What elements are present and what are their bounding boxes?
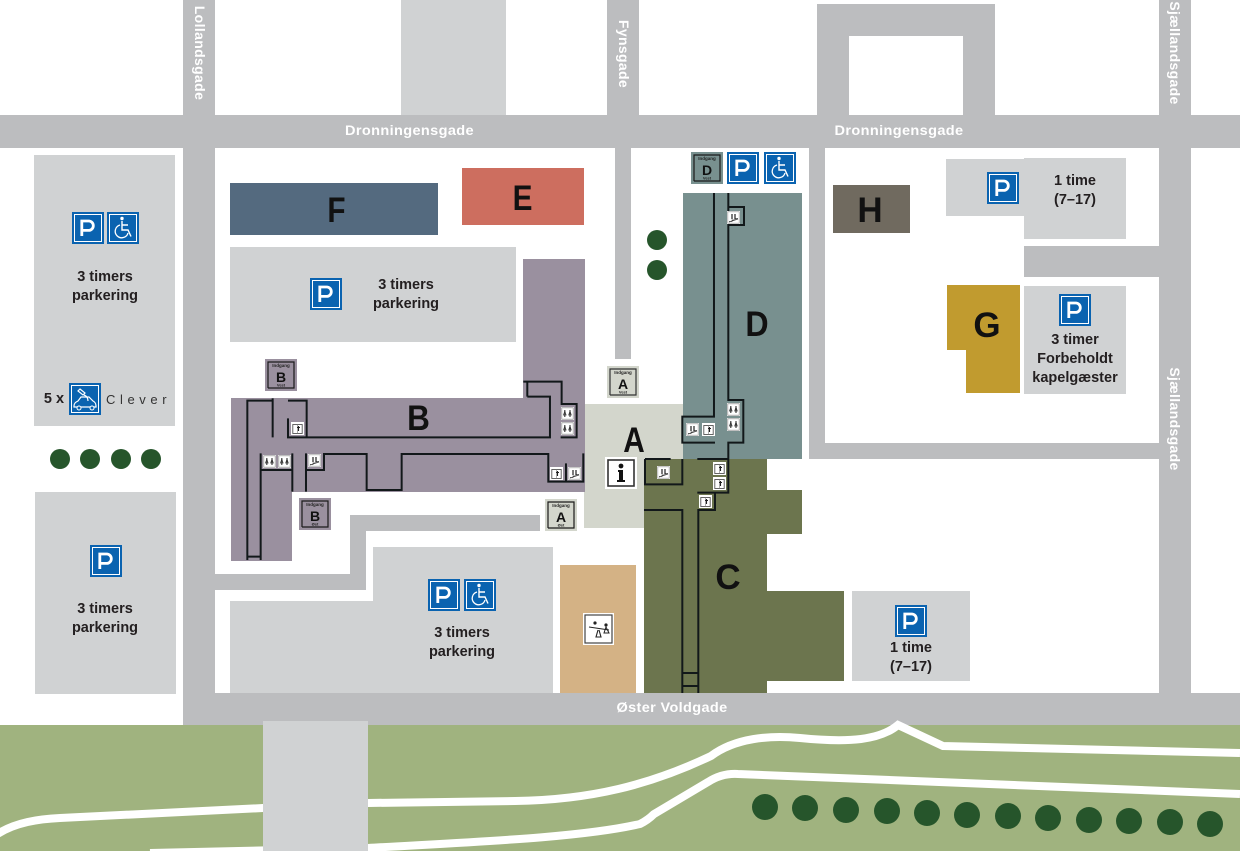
building H xyxy=(833,185,910,233)
entrance sign: B Vest: B xyxy=(276,369,286,385)
entrance sign: B Vest: Indgang xyxy=(272,363,290,368)
entrance sign: B Øst: Indgang xyxy=(306,502,324,507)
road labels: Dronningensgade xyxy=(345,122,474,138)
building G: G xyxy=(973,306,1001,345)
parking signs xyxy=(72,152,1091,637)
top parking strip xyxy=(401,0,506,115)
road labels xyxy=(192,1,1183,715)
parking labels: (7–17) xyxy=(890,659,932,675)
floor plan lines: buildings A, C and D xyxy=(644,193,743,693)
entrance sign: A Vest: Indgang xyxy=(614,370,632,375)
entrance sign: B Øst: Øst xyxy=(312,522,319,526)
parking lots xyxy=(34,155,1126,694)
parking labels: 3 timers xyxy=(378,277,434,293)
entrance sign: A Vest: A xyxy=(618,376,628,392)
entrance sign: D Vest: Indgang xyxy=(698,156,716,161)
entrance sign: B Vest: Vest xyxy=(277,382,286,388)
building A xyxy=(584,404,684,528)
parking labels: 3 timers xyxy=(77,269,133,285)
parking labels: 3 timers xyxy=(77,601,133,617)
entrance sign: A Øst xyxy=(545,499,577,531)
parking labels: 1 time xyxy=(1054,173,1096,189)
entrance sign: A Øst: A xyxy=(556,509,566,525)
trees: park row xyxy=(752,794,1223,837)
building C xyxy=(644,459,844,693)
icon: playground xyxy=(583,613,614,645)
facility icons xyxy=(263,211,740,508)
building B xyxy=(231,259,585,561)
parking labels: parkering xyxy=(373,296,439,312)
building F xyxy=(230,183,438,235)
building letters: B xyxy=(407,400,430,438)
parking labels xyxy=(72,173,1118,675)
building E xyxy=(462,168,584,225)
parking labels: (7–17) xyxy=(1054,192,1096,208)
clever charging xyxy=(44,383,171,415)
parking labels: 1 time xyxy=(890,640,932,656)
parking labels: kapelgæster xyxy=(1032,370,1118,386)
parking labels: parkering xyxy=(72,620,138,636)
building letters: A xyxy=(623,421,645,460)
road labels: Fynsgade xyxy=(616,20,632,88)
road labels: Sjællandsgade xyxy=(1167,1,1183,105)
parking labels: 3 timers xyxy=(434,625,490,641)
floor plan lines: building B xyxy=(247,382,583,560)
road labels: Dronningensgade xyxy=(834,122,964,138)
parking labels: 3 timer xyxy=(1051,332,1099,348)
entrance sign: D Vest: Vest xyxy=(703,176,712,180)
parking labels: parkering xyxy=(429,644,495,660)
road labels: Lollandsgade xyxy=(192,6,208,100)
building E: E xyxy=(513,179,532,218)
parking labels: Forbeholdt xyxy=(1037,351,1113,367)
park area xyxy=(0,721,1240,851)
trees: courtyard xyxy=(647,230,667,280)
building letters: D xyxy=(745,306,769,344)
entrance sign: A Vest xyxy=(607,366,639,398)
building letters: C xyxy=(715,558,741,597)
road labels: Sjællandsgade xyxy=(1167,367,1183,471)
trees: left row xyxy=(50,449,161,469)
entrance sign: B Øst xyxy=(299,498,331,530)
building H: H xyxy=(857,191,883,230)
building D xyxy=(683,193,802,459)
clever charging: 5 x xyxy=(44,391,64,407)
parking labels: parkering xyxy=(72,288,138,304)
building letters xyxy=(407,306,769,597)
building F: F xyxy=(327,191,346,230)
entrance sign: A Øst: Indgang xyxy=(552,503,570,508)
entrance sign: A Vest: Vest xyxy=(619,390,628,394)
entrance sign: B Øst: B xyxy=(310,508,320,524)
park paths xyxy=(0,725,1240,835)
floor plan lines: building D top nook xyxy=(728,207,744,225)
road labels: Øster Voldgade xyxy=(616,699,728,715)
bridge xyxy=(263,721,368,851)
playground xyxy=(560,565,636,693)
entrance sign: A Øst: Øst xyxy=(558,522,565,528)
entrance sign: D Vest: D xyxy=(702,162,712,178)
entrance sign: D Vest xyxy=(691,152,723,184)
clever charging: Clever xyxy=(106,392,171,407)
info sign xyxy=(605,457,637,489)
entrance sign: B Vest xyxy=(265,359,297,391)
building G xyxy=(947,285,1020,393)
